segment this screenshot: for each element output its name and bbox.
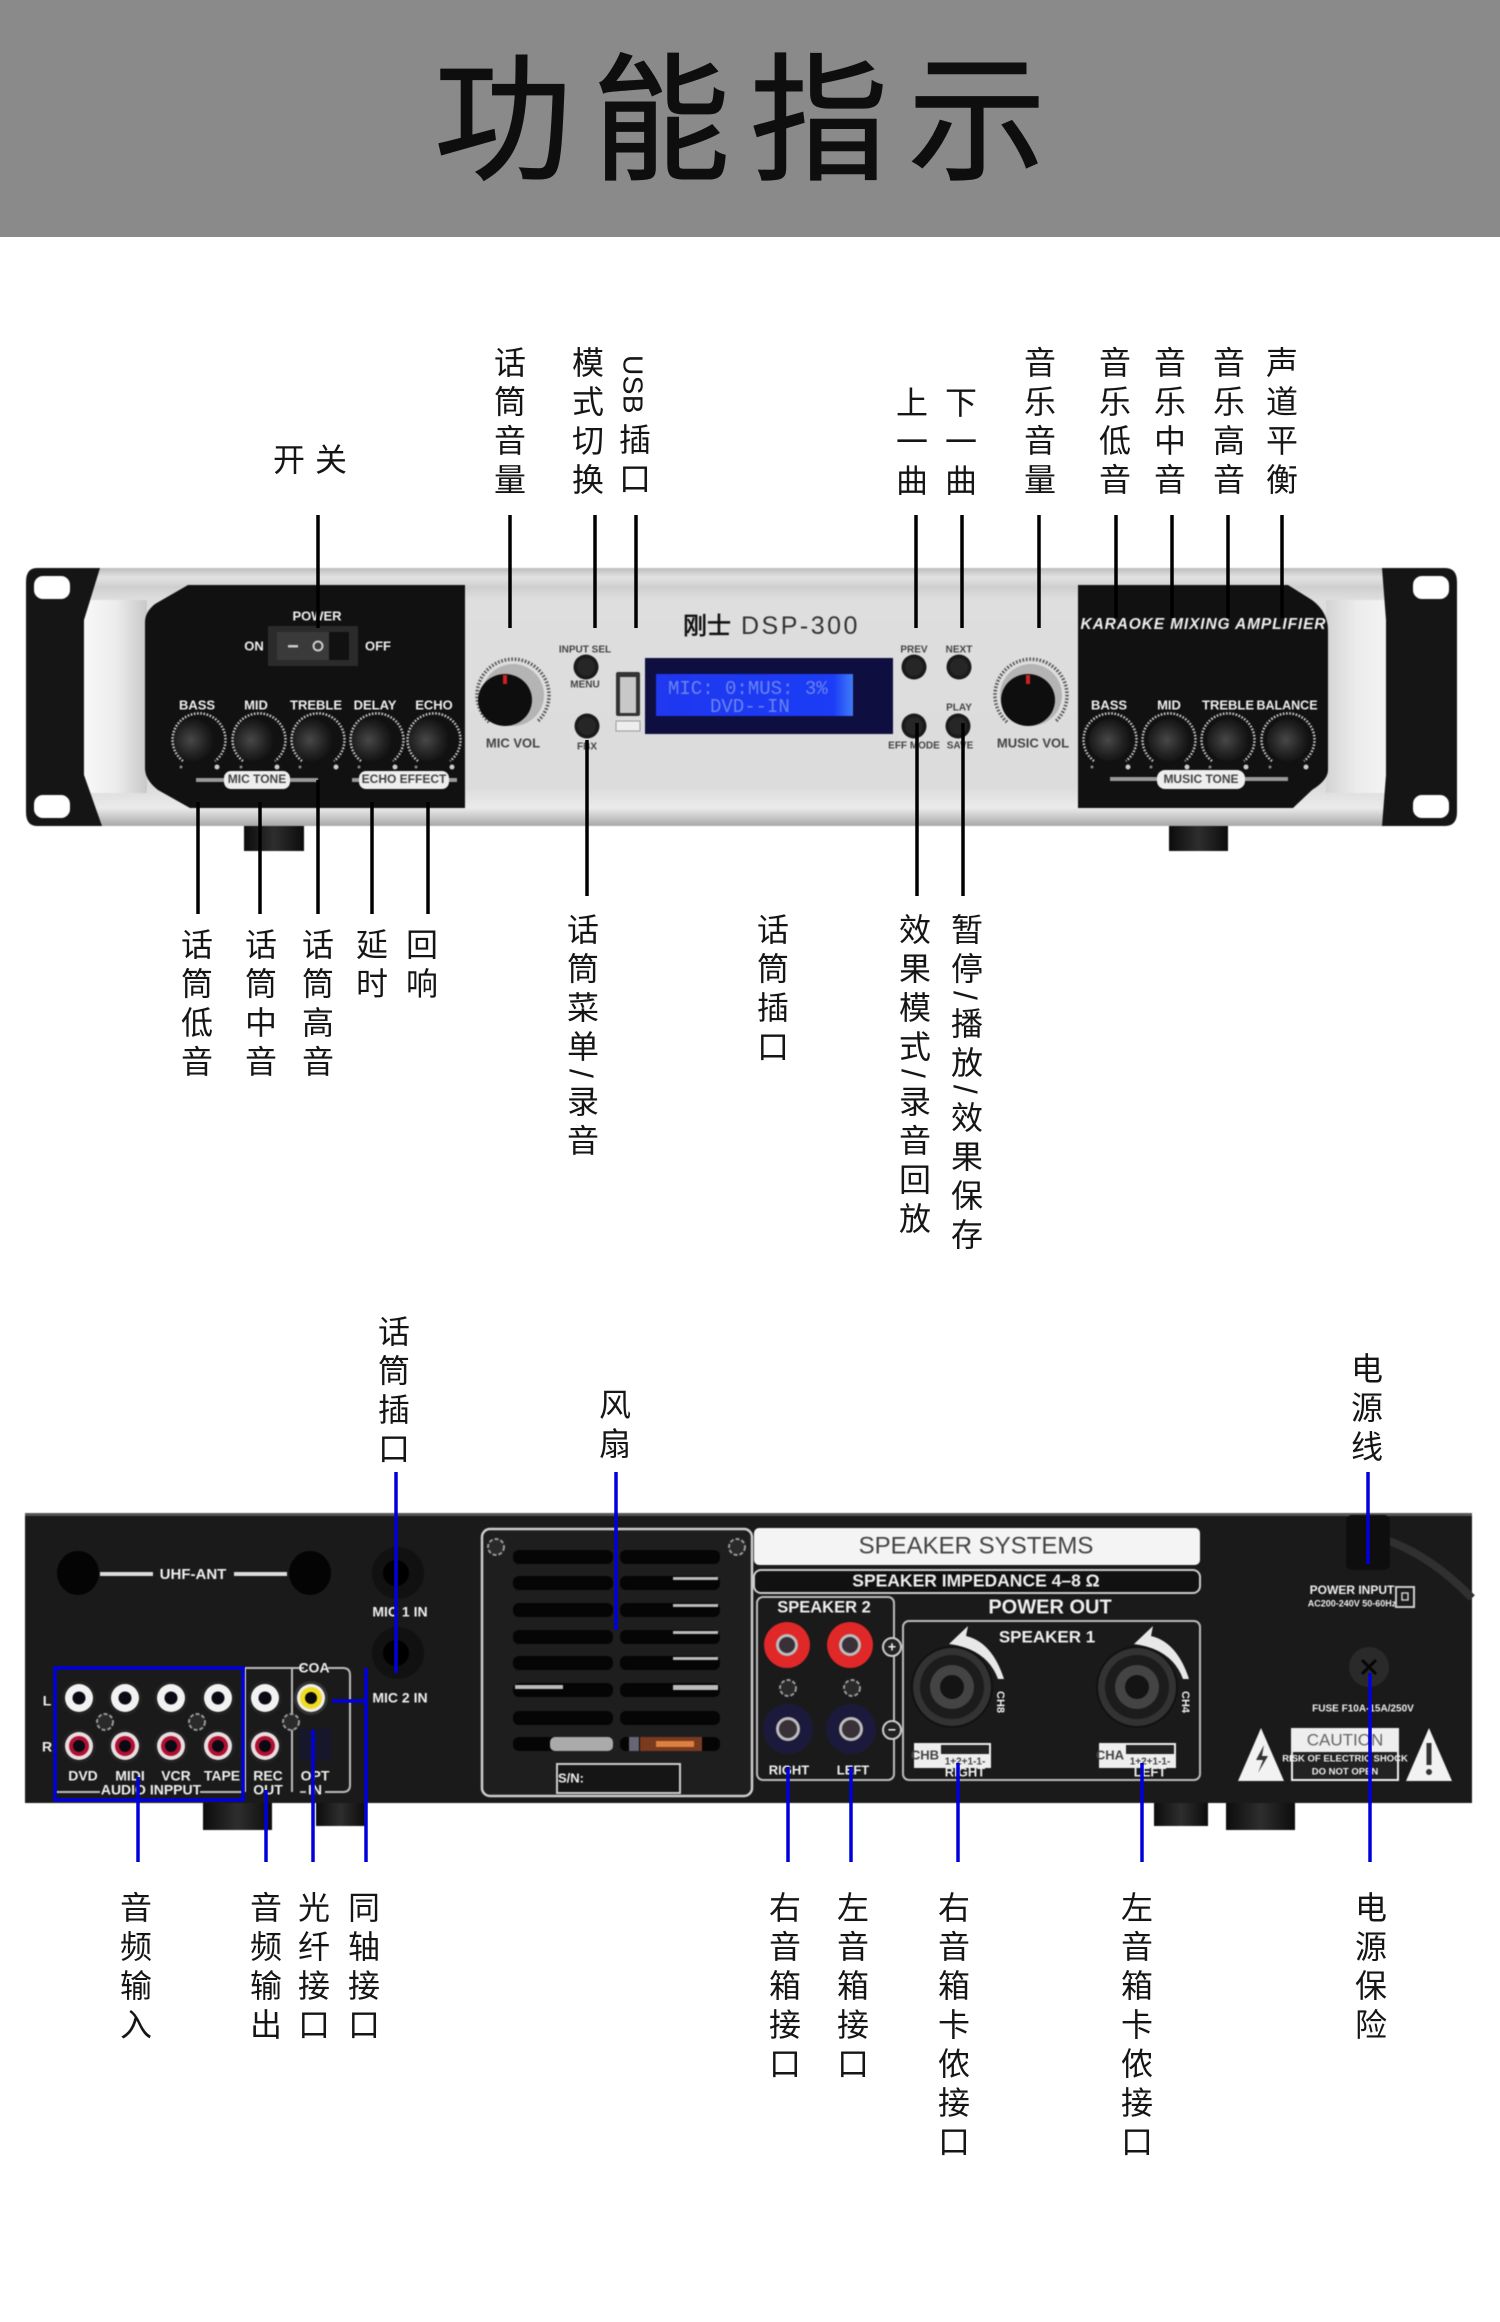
label: music treble: 音乐高音 — [1209, 346, 1245, 502]
chassis back — [25, 1513, 1472, 1803]
music tone knobs — [1084, 697, 1318, 770]
front panel labels — [177, 346, 1298, 1257]
power switch: ON — [244, 638, 264, 653]
label: coaxial: 同轴接口 — [344, 1891, 380, 2047]
label: mic volume: 话筒音量 — [490, 346, 526, 502]
label: left speakon: 左音箱卡侬接口 — [1117, 1891, 1153, 2164]
transport buttons: PREV — [900, 645, 928, 656]
label: left speaker: 左音箱接口 — [833, 1891, 869, 2086]
rear panel amplifier — [25, 1513, 1472, 1830]
fan vent: S/N: — [558, 1770, 584, 1785]
speaker 1 connectors: CH4 — [1179, 1691, 1191, 1714]
label: usb: USB — [618, 355, 648, 414]
fan vent — [482, 1529, 752, 1796]
transport buttons: NEXT — [946, 645, 972, 656]
music tone label — [1110, 770, 1288, 789]
warning labels: CAUTION — [1307, 1730, 1383, 1749]
fuse: FUSE F10A-15A/250V — [1312, 1704, 1414, 1715]
label: mic mid: 话筒中音 — [241, 928, 277, 1084]
label: music bass: 音乐低音 — [1095, 346, 1131, 502]
music tone knobs: MID — [1157, 697, 1181, 712]
echo effect label: ECHO EFFECT — [362, 772, 447, 786]
speaker 1 connectors: 1+2+1-1- — [945, 1757, 985, 1768]
audio jacks panel: OPT — [301, 1768, 330, 1784]
power switch — [244, 608, 391, 666]
mic tone knobs: TREBLE — [290, 697, 342, 712]
left control panel — [145, 585, 465, 808]
mic tone knobs: MID — [244, 697, 268, 712]
right control panel — [1078, 585, 1328, 808]
mic tone knobs: DELAY — [354, 697, 397, 712]
usb port — [616, 672, 640, 731]
label: play pause: 暂停/播放/效果保存 — [947, 913, 983, 1257]
right control panel: KARAOKE MIXING AMPLIFIER — [1080, 616, 1326, 633]
label: audio input: 音频输入 — [116, 1891, 152, 2047]
audio jacks panel: AUDIO INPPUT — [101, 1782, 202, 1798]
mic volume knob: MIC VOL — [486, 735, 540, 750]
transport buttons: SAVE — [947, 741, 974, 752]
lcd display: MIC: 0:MUS: 3% — [668, 678, 828, 700]
silver chassis — [85, 568, 1405, 826]
label: mic bass: 话筒低音 — [177, 928, 213, 1084]
input select and fbx buttons: FBX — [577, 742, 597, 753]
input select and fbx buttons: MENU — [570, 680, 600, 691]
speaker 2 terminals: + — [888, 1639, 896, 1655]
speaker 1 connectors: SPEAKER 1 — [999, 1627, 1095, 1646]
audio jacks panel: OUT — [253, 1782, 283, 1798]
speaker 1 connectors: 1+2+1-1- — [1130, 1757, 1170, 1768]
music volume knob — [995, 659, 1069, 750]
music tone label: MUSIC TONE — [1163, 772, 1239, 786]
music tone knobs: BASS — [1091, 697, 1127, 712]
speaker 1 connectors: CHB — [911, 1747, 939, 1762]
input select and fbx buttons — [559, 645, 611, 753]
audio jacks panel: TAPE — [204, 1768, 240, 1784]
transport buttons — [888, 645, 974, 752]
mic tone knobs: BASS — [179, 697, 215, 712]
label: music volume: 音乐音量 — [1020, 346, 1056, 502]
audio jacks panel: DVD — [68, 1768, 98, 1784]
left rack bracket — [26, 568, 102, 826]
model name — [683, 606, 860, 641]
speaker 2 terminals: LEFT — [837, 1762, 869, 1777]
label: fuse: 电源保险 — [1351, 1891, 1387, 2047]
mic jacks: MIC 2 IN — [372, 1690, 428, 1706]
mic tone label — [196, 771, 318, 789]
transport buttons: EFF MODE — [888, 741, 940, 752]
transport buttons: PLAY — [946, 703, 972, 714]
label: mic menu: 话筒菜单/录音 — [563, 913, 599, 1163]
audio jacks panel: VCR — [161, 1768, 191, 1784]
fuse — [1312, 1647, 1414, 1715]
label: right speakon: 右音箱卡侬接口 — [934, 1891, 970, 2164]
title banner — [0, 0, 1500, 237]
mic jacks: MIC 1 IN — [372, 1604, 428, 1620]
label: fan: 风扇 — [595, 1388, 631, 1466]
label: previous: 上一曲 — [892, 386, 928, 503]
audio jacks panel: REC — [253, 1768, 283, 1784]
warning labels — [1238, 1728, 1452, 1781]
speaker 2 terminals — [757, 1597, 901, 1780]
rear panel leader lines — [55, 1472, 1370, 1862]
mic tone knobs — [172, 697, 460, 770]
antenna holes — [57, 1551, 331, 1595]
front panel leader lines — [198, 515, 1282, 914]
power switch: POWER — [292, 608, 342, 623]
mic tone label: MIC TONE — [228, 772, 286, 786]
input select and fbx buttons: INPUT SEL — [559, 645, 611, 656]
rear feet — [203, 1800, 1295, 1830]
label: mic jack: 话筒插口 — [374, 1315, 410, 1471]
label: mode switch: 模式切换 — [568, 346, 604, 502]
power cable and input: AC200-240V 50-60Hz — [1308, 1598, 1397, 1608]
label: power cord: 电源线 — [1347, 1352, 1383, 1469]
audio jacks panel — [42, 1660, 350, 1798]
speaker systems banner — [754, 1528, 1200, 1565]
music volume knob: MUSIC VOL — [997, 735, 1069, 750]
label: mic treble: 话筒高音 — [298, 928, 334, 1084]
speaker 1 connectors — [903, 1596, 1200, 1780]
audio jacks panel: L — [43, 1693, 52, 1709]
lcd display: DVD--IN — [710, 696, 790, 718]
speaker systems banner: SPEAKER SYSTEMS — [859, 1532, 1093, 1559]
label: next: 下一曲 — [941, 386, 977, 503]
label: power switch: 开关 — [273, 442, 357, 478]
power cable and input — [1308, 1515, 1472, 1608]
warning labels: RISK OF ELECTRIC SHOCK — [1282, 1754, 1408, 1765]
label: right speaker: 右音箱接口 — [765, 1891, 801, 2086]
audio jacks panel: COA — [298, 1660, 330, 1676]
label: optical: 光纤接口 — [294, 1891, 330, 2047]
speaker 1 connectors: RIGHT — [945, 1764, 985, 1779]
label: usb: 插口 — [615, 423, 651, 501]
audio jacks panel: MIDI — [115, 1768, 145, 1784]
audio jacks panel: R — [42, 1739, 52, 1755]
power cable and input: POWER INPUT — [1310, 1583, 1395, 1597]
label: audio output: 音频输出 — [246, 1891, 282, 2047]
mic jacks — [372, 1547, 428, 1706]
speaker 1 connectors: LEFT — [1134, 1764, 1166, 1779]
power switch: OFF — [365, 638, 391, 653]
label: delay: 延时 — [352, 928, 388, 1006]
lcd display — [645, 658, 893, 734]
label: mic jack: 话筒插口 — [753, 913, 789, 1069]
impedance banner — [754, 1570, 1200, 1593]
speaker 1 connectors: POWER OUT — [988, 1596, 1112, 1618]
label: music mid: 音乐中音 — [1150, 346, 1186, 502]
speaker 2 terminals: SPEAKER 2 — [777, 1598, 871, 1616]
mic tone knobs: ECHO — [415, 697, 453, 712]
audio jacks panel: IN — [308, 1782, 322, 1798]
model name: DSP-300 — [741, 612, 860, 640]
rear panel labels — [116, 1315, 1387, 2164]
label: balance: 声道平衡 — [1262, 346, 1298, 502]
label: effect mode: 效果模式/录音回放 — [895, 913, 931, 1241]
right rack bracket — [1382, 568, 1457, 826]
antenna holes: UHF-ANT — [160, 1566, 226, 1583]
speaker 2 terminals: RIGHT — [769, 1762, 809, 1777]
speaker 1 connectors: CH8 — [994, 1691, 1006, 1713]
title: 功能指示 — [434, 9, 1066, 209]
music tone knobs: TREBLE — [1202, 697, 1254, 712]
feet — [244, 824, 1228, 851]
impedance banner: SPEAKER IMPEDANCE 4–8 Ω — [852, 1571, 1100, 1591]
speaker 1 connectors: CHA — [1096, 1747, 1125, 1762]
echo effect label — [352, 771, 457, 789]
warning labels: DO NOT OPEN — [1312, 1767, 1378, 1778]
speaker 2 terminals: − — [888, 1722, 896, 1738]
front panel amplifier — [26, 568, 1457, 851]
model name: 刚士 — [683, 606, 731, 641]
music tone knobs: BALANCE — [1256, 698, 1318, 712]
mic volume knob — [477, 659, 549, 750]
label: echo: 回响 — [402, 928, 438, 1006]
